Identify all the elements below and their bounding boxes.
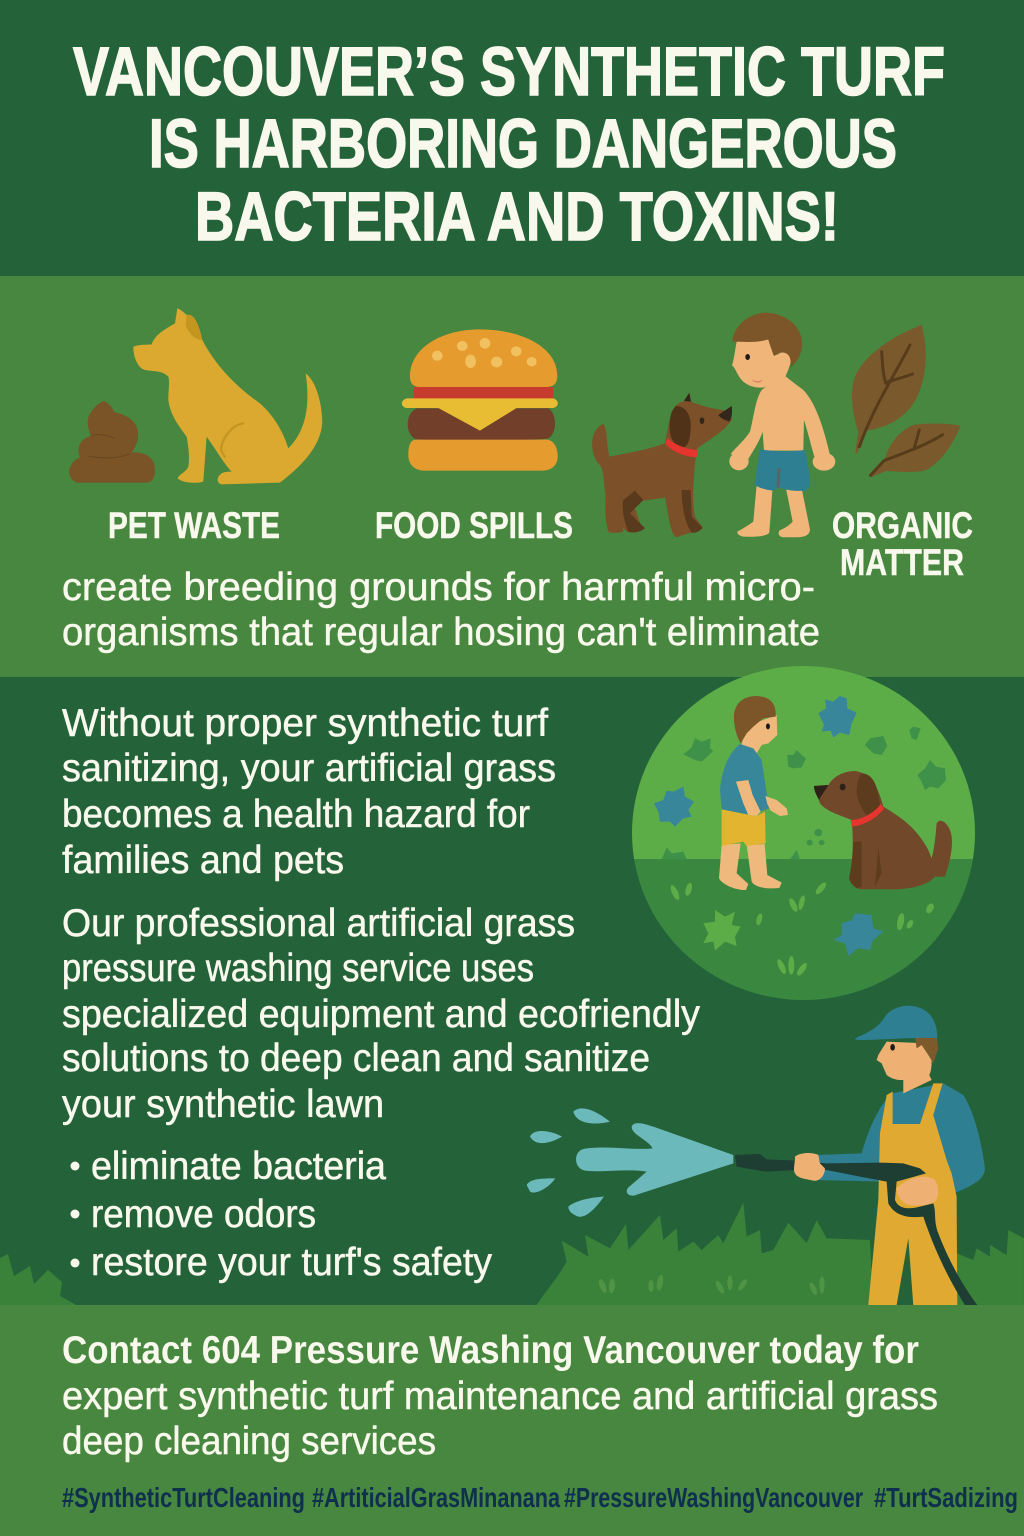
- illustration: contaminated lawn circle: [630, 660, 980, 1009]
- text: health hazard: families and pets: [62, 839, 344, 882]
- text: call to action: expert synthetic turf maintenance and artificial grass: [62, 1375, 938, 1418]
- icon: yellow dog: [133, 308, 322, 484]
- title: [73, 33, 945, 255]
- title: BACTERIA AND TOXINS!: [195, 178, 839, 255]
- icon: grass right: [537, 1203, 1024, 1305]
- panel: contact: [0, 1305, 1024, 1536]
- text: service: specialized equipment and ecofriendly: [62, 993, 700, 1036]
- panel: health hazard and service: [0, 660, 1024, 1306]
- panel: causes: [0, 276, 1024, 677]
- text: call to action: deep cleaning services: [62, 1420, 436, 1463]
- list: benefits: restore your turf's safety: [91, 1241, 492, 1284]
- text: health hazard: becomes a health hazard for: [62, 793, 530, 836]
- text: health hazard: sanitizing, your artificial grass: [62, 747, 556, 790]
- icon: child: [719, 696, 788, 890]
- panel: header: [0, 0, 1024, 276]
- illustration: pressure washing worker: [527, 1006, 985, 1305]
- text: breeding grounds: create breeding grounds for harmful micro-: [62, 566, 815, 609]
- text: health hazard: [62, 702, 556, 882]
- label: food spills: FOOD SPILLS: [375, 505, 573, 546]
- text: health hazard: Without proper synthetic turf: [62, 702, 548, 745]
- text: breeding grounds: [62, 566, 820, 654]
- label: organic matter: MATTER: [840, 542, 964, 583]
- text: hashtags: #ArtiticialGrasMinanana: [312, 1482, 560, 1513]
- label: pet waste: PET WASTE: [108, 505, 280, 546]
- icon: brown puppy: [592, 393, 732, 537]
- icon: burger: [402, 329, 558, 471]
- label: organic matter: [832, 505, 973, 583]
- text: service: [62, 902, 700, 1126]
- text: hashtags: [62, 1482, 1018, 1513]
- text: hashtags: #PressureWashingVancouver: [564, 1482, 863, 1513]
- text: service: Our professional artificial grass: [62, 902, 575, 945]
- text: service: pressure washing service uses: [62, 947, 534, 990]
- label: organic matter: ORGANIC: [832, 505, 973, 546]
- icon: boy in blue shorts: [729, 313, 835, 537]
- text: hashtags: #SyntheticTurtCleaning: [62, 1482, 305, 1513]
- list: benefits: eliminate bacteria: [91, 1145, 386, 1188]
- text: breeding grounds: organisms that regular hosing can't eliminate: [62, 611, 820, 654]
- icon: sitting dog: [814, 771, 952, 889]
- icon: germs: [654, 696, 946, 977]
- text: call to action: Contact 604 Pressure Washing Vancouver today for: [62, 1329, 919, 1372]
- icon: pet waste pile: [69, 401, 155, 483]
- list: benefits: [70, 1145, 492, 1284]
- text: call to action: [62, 1329, 938, 1463]
- text: service: solutions to deep clean and sanitize: [62, 1037, 650, 1080]
- text: service: your synthetic lawn: [62, 1083, 384, 1126]
- icon: worker: [735, 1006, 985, 1305]
- list: benefits: remove odors: [91, 1193, 316, 1236]
- icon: brown leaves: [852, 325, 961, 477]
- icon: water spray: [527, 1108, 733, 1217]
- icon: grass left: [0, 1254, 78, 1306]
